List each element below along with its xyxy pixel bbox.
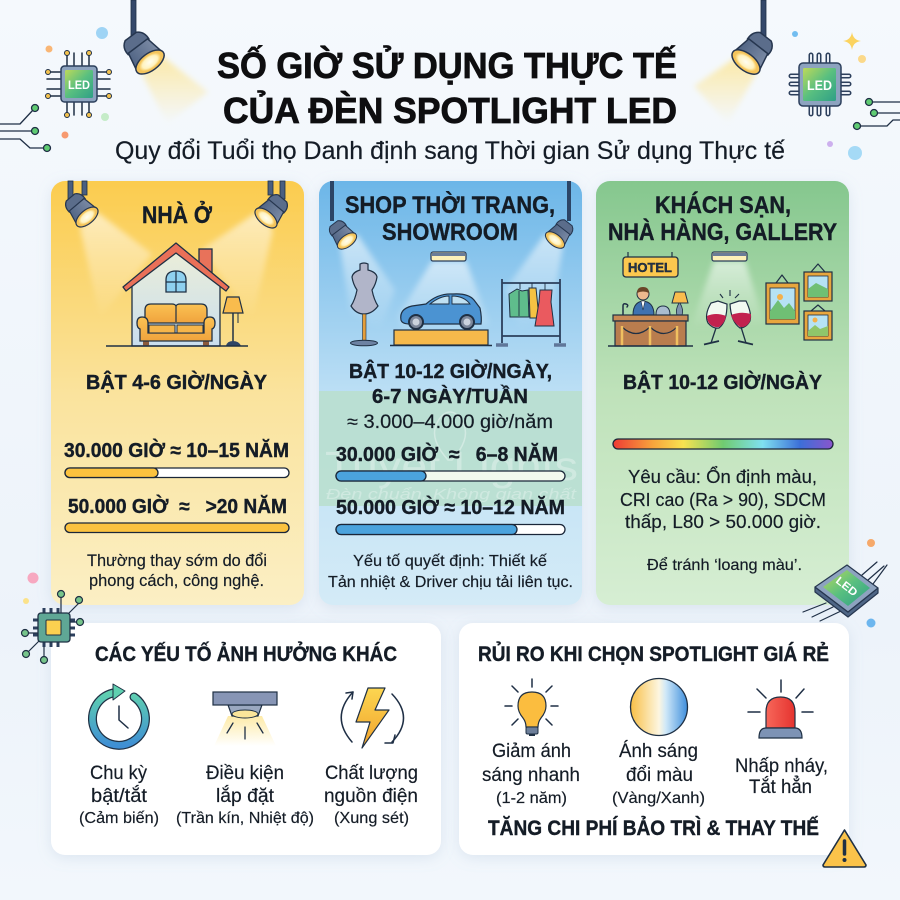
icon: dim light bulb	[505, 679, 558, 735]
icon: isometric LED chip	[803, 562, 887, 621]
icon: left circuit traces	[0, 104, 50, 152]
icon: warning triangle	[823, 830, 866, 867]
bar: 30.000 hours	[336, 442, 565, 481]
icon: left LED chip: LED	[68, 78, 90, 92]
subtitle: Quy đổi Tuổi thọ Danh định sang Thời gian Sử dụng Thực tế	[115, 137, 785, 165]
factor: power quality: nguồn điện	[324, 786, 418, 807]
requirements text: CRI cao (Ra > 90), SDCM	[620, 489, 826, 510]
note: Tản nhiệt & Driver chịu tải liên tục.	[328, 574, 573, 591]
risk: fast dimming: sáng nhanh	[482, 765, 580, 786]
factor: power quality: (Xung sét)	[334, 810, 409, 827]
risk: fast dimming: (1-2 năm)	[496, 790, 567, 807]
bar: 50.000 hours	[65, 494, 289, 532]
illustration: reception desk	[608, 287, 693, 346]
heading: CÁC YẾU TỐ ẢNH HƯỞNG KHÁC	[95, 642, 397, 666]
watermark band: Tuyet Lights	[325, 443, 578, 489]
illustration: car on platform	[390, 294, 492, 346]
bar: 50.000 hours	[336, 495, 565, 534]
panel: shop thời trang, showroom	[319, 181, 582, 605]
title	[217, 44, 677, 131]
spotlights and ceiling light	[325, 181, 577, 340]
factor: installation conditions: (Trần kín, Nhiệt độ)	[176, 810, 314, 827]
risk: colour shift: Ánh sáng	[619, 741, 698, 762]
icon: lightning bolt power quality	[341, 688, 404, 748]
factor: installation conditions: lắp đặt	[216, 785, 275, 807]
usage hours: BẬT 10-12 GIỜ/NGÀY,	[349, 359, 552, 383]
watermark band	[319, 391, 582, 506]
risk: colour shift	[612, 741, 705, 807]
factor: installation conditions	[176, 763, 314, 827]
usage hours: 6-7 NGÀY/TUẦN	[372, 385, 528, 408]
icon: installation fixture	[213, 692, 277, 746]
note	[87, 551, 267, 590]
requirements text	[620, 466, 826, 532]
icon: right circuit traces	[854, 98, 900, 130]
bar: 50.000 hours: 50.000 GIỜ ≈ 10–12 NĂM	[336, 495, 565, 519]
heading: SHOP THỜI TRANG,	[345, 191, 555, 219]
title: SỐ GIỜ SỬ DỤNG THỰC TẾ	[217, 44, 677, 86]
note: Để tránh ‘loang màu’.	[647, 556, 802, 574]
icon: isometric LED chip: LED	[833, 575, 860, 599]
heading: RỦI RO KHI CHỌN SPOTLIGHT GIÁ RẺ	[478, 642, 829, 666]
risk: flicker: Tắt hẳn	[749, 776, 812, 798]
risk: fast dimming: Giảm ánh	[492, 741, 571, 762]
requirements text: thấp, L80 > 50.000 giờ.	[625, 511, 821, 532]
conclusion: TĂNG CHI PHÍ BẢO TRÌ & THAY THẾ	[488, 817, 819, 840]
icon: colour shift disc	[630, 678, 688, 736]
note: Thường thay sớm do đổi	[87, 551, 267, 570]
factor: on/off cycle	[79, 763, 159, 827]
risk: colour shift: (Vàng/Xanh)	[612, 790, 705, 807]
rainbow spectrum bar	[613, 439, 833, 449]
decorative dots right of panels	[866, 539, 876, 628]
heading: NHÀ HÀNG, GALLERY	[608, 218, 837, 246]
factor: installation conditions: Điều kiện	[206, 763, 284, 784]
heading: SHOWROOM	[382, 219, 518, 246]
note: phong cách, công nghệ.	[89, 571, 264, 590]
illustration: framed pictures	[766, 264, 832, 340]
icon: on/off cycle clock	[92, 684, 145, 745]
illustration: hotel sign: HOTEL	[628, 260, 672, 275]
risk: flicker: Nhấp nháy,	[735, 756, 828, 777]
ceiling light	[690, 252, 765, 330]
panel: các yếu tố ảnh hưởng khác	[51, 623, 441, 855]
factor: power quality	[324, 763, 418, 827]
illustration: clothing rack	[496, 279, 566, 345]
factor: on/off cycle: (Cảm biến)	[79, 810, 159, 827]
spotlights with beams	[60, 181, 293, 318]
heading: NHÀ Ở	[142, 200, 212, 229]
usage hours: BẬT 10-12 GIỜ/NGÀY	[623, 370, 823, 394]
risk: colour shift: đổi màu	[626, 765, 693, 786]
icon: right ceiling spotlight	[694, 0, 779, 124]
heading	[345, 191, 555, 246]
icon: left LED chip	[46, 50, 112, 118]
title: CỦA ĐÈN SPOTLIGHT LED	[223, 89, 677, 131]
watermark band: Đèn chuẩn, Không gian chất	[326, 486, 577, 503]
decorative dots left	[46, 27, 109, 138]
heading: KHÁCH SẠN,	[655, 191, 791, 219]
illustration: wine glasses	[704, 290, 753, 344]
usage hours	[347, 359, 553, 433]
factor: power quality: Chất lượng	[325, 763, 418, 784]
icon: left ceiling spotlight	[118, 0, 208, 124]
note: Yếu tố quyết định: Thiết kế	[353, 553, 547, 570]
bar: 30.000 hours: 30.000 GIỜ ≈ 10–15 NĂM	[64, 438, 289, 462]
illustration: hotel sign	[623, 252, 678, 277]
panel: khách sạn, nhà hàng, gallery	[596, 181, 849, 605]
icon: small processor chip	[22, 590, 84, 664]
bar: 30.000 hours	[64, 438, 289, 478]
factor: on/off cycle: Chu kỳ	[90, 763, 147, 784]
decorative dots and star right	[792, 31, 866, 160]
factor: on/off cycle: bật/tắt	[91, 785, 148, 807]
illustration: mannequin	[350, 263, 378, 346]
panel: rủi ro khi chọn spotlight giá rẻ	[459, 623, 849, 855]
panel: nhà ở	[51, 181, 304, 605]
heading	[608, 191, 837, 246]
usage hours: ≈ 3.000–4.000 giờ/năm	[347, 412, 553, 433]
requirements text: Yêu cầu: Ổn định màu,	[628, 466, 817, 487]
icon: flashing siren	[748, 680, 813, 738]
risk: fast dimming	[482, 741, 580, 807]
illustration: house	[106, 243, 248, 346]
icon: right LED chip: LED	[807, 77, 832, 93]
note	[328, 553, 573, 591]
icon: right LED chip	[791, 55, 849, 114]
risk: flicker	[735, 756, 828, 798]
bar: 50.000 hours: 50.000 GIỜ ≈ >20 NĂM	[68, 494, 287, 518]
bar: 30.000 hours: 30.000 GIỜ ≈ 6–8 NĂM	[336, 442, 558, 466]
decorative dots lower left	[23, 572, 38, 604]
usage hours: BẬT 4-6 GIỜ/NGÀY	[86, 370, 268, 394]
